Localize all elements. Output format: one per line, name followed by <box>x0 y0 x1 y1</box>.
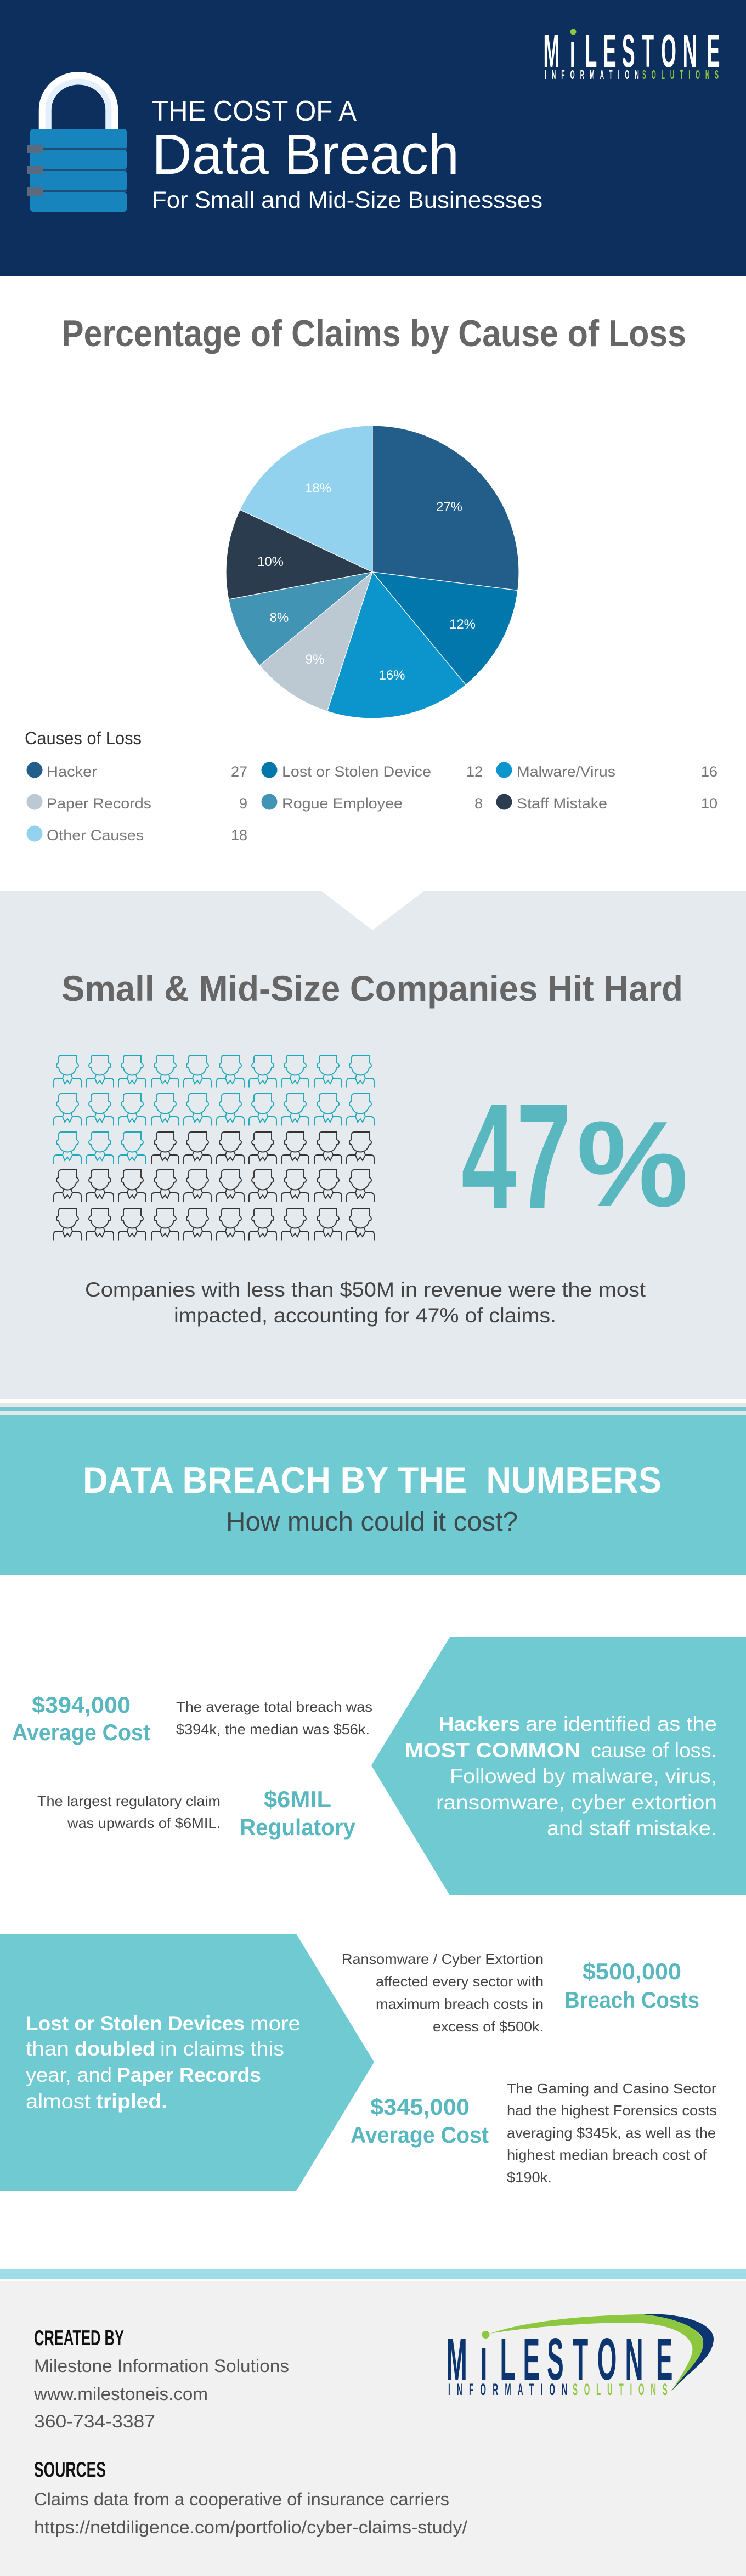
text: average total breach: The average total breach was <box>176 1699 372 1715</box>
subtitle: For Small and Mid-Size Businessses <box>152 187 542 213</box>
banner heading: DATA BREACH BY THE NUMBERS <box>83 1459 662 1501</box>
text: largest regulatory claim <box>37 1793 221 1831</box>
divider: light blue band <box>0 2269 746 2279</box>
pie chart: claims by cause: 9% <box>306 652 324 667</box>
text: contact details <box>33 2356 289 2431</box>
heading: small and mid-size: Small & Mid-Size Companies Hit Hard <box>61 968 683 1009</box>
panel: hackers arrow callout: ransomware, cyber extortion <box>436 1791 717 1814</box>
text: gaming and casino sector <box>507 2080 717 2186</box>
stat: 345,000 average cost: $345,000 <box>370 2094 470 2120</box>
legend title: Causes of Loss <box>25 728 142 748</box>
pie chart: claims by cause: 18% <box>305 481 331 496</box>
text: ransomware cyber extortion: excess of $500k. <box>433 2018 544 2035</box>
legend: causes of loss: Rogue Employee <box>282 795 403 812</box>
panel: hackers arrow callout: are identified as the <box>525 1713 717 1735</box>
text: gaming and casino sector: had the highest Forensics costs <box>507 2102 717 2119</box>
stat: 500,000 breach costs: Breach Costs <box>564 1987 699 2013</box>
panel: hackers arrow callout: Followed by malware, virus, <box>450 1765 717 1787</box>
panel: lost or stolen devices arrow callout: more <box>250 2012 301 2035</box>
text: ransomware cyber extortion: affected every sector with <box>376 1973 544 1990</box>
legend: causes of loss: Malware/Virus <box>517 763 615 780</box>
logo: milestone white: SOLUTIONS <box>642 67 719 82</box>
legend: causes of loss: 9 <box>239 795 247 812</box>
logo: milestone colour: SOLUTIONS <box>573 2380 668 2398</box>
panel: lost or stolen devices arrow callout <box>0 1934 374 2191</box>
pie chart: claims by cause <box>226 426 519 718</box>
stat: 500,000 breach costs: $500,000 <box>583 1958 681 1984</box>
title: the cost of a: THE COST OF A <box>152 95 357 127</box>
stat: 394,000 average cost <box>12 1692 150 1745</box>
title: data breach: Data Breach <box>152 123 459 186</box>
panel: lost or stolen devices arrow callout: doubled <box>75 2037 155 2060</box>
logo: milestone white: INFORMATION <box>545 67 639 82</box>
pie chart: claims by cause: 16% <box>378 668 405 683</box>
legend: causes of loss: 16 <box>701 763 717 780</box>
stat: 345,000 average cost <box>351 2094 489 2148</box>
big number: 47 percent: % <box>577 1096 688 1232</box>
pie chart: claims by cause: 27% <box>436 500 462 514</box>
heading: sources: SOURCES <box>34 2458 106 2482</box>
panel: hackers arrow callout: cause of loss. <box>591 1739 717 1762</box>
paragraph: companies under 50M: impacted, accounting for 47% of claims. <box>174 1304 556 1327</box>
text: sources list <box>34 2489 467 2537</box>
legend: causes of loss: Lost or Stolen Device <box>282 763 431 780</box>
stat: 6MIL regulatory <box>240 1786 356 1840</box>
stat: 394,000 average cost: Average Cost <box>12 1719 150 1745</box>
banner: data breach by the numbers <box>0 1415 746 1575</box>
text: contact details: Milestone Information Solutions <box>34 2356 289 2376</box>
panel: hackers arrow callout: and staff mistake. <box>547 1817 717 1839</box>
legend: causes of loss: 8 <box>474 795 483 812</box>
legend: causes of loss: 12 <box>466 763 483 780</box>
legend: causes of loss: Paper Records <box>47 795 151 812</box>
text: ransomware cyber extortion: Ransomware / Cyber Extortion <box>342 1951 544 1967</box>
panel: lost or stolen devices arrow callout: almost <box>26 2090 91 2113</box>
panel: lost or stolen devices arrow callout: than <box>26 2037 69 2060</box>
stat: 500,000 breach costs <box>564 1958 699 2013</box>
text: contact details: www.milestoneis.com <box>33 2384 208 2404</box>
text: average total breach <box>176 1699 372 1737</box>
panel: lost or stolen devices arrow callout: Paper Records <box>117 2064 261 2086</box>
stat: 394,000 average cost: $394,000 <box>32 1692 131 1718</box>
text: contact details: 360-734-3387 <box>34 2411 155 2431</box>
paragraph: companies under 50M: Companies with less than $50M in revenue were the most <box>85 1278 646 1301</box>
panel: hackers arrow callout <box>371 1637 746 1895</box>
legend: causes of loss: Staff Mistake <box>517 795 607 812</box>
panel: hackers arrow callout: MOST COMMON <box>405 1739 580 1762</box>
legend: causes of loss: 10 <box>701 795 717 812</box>
stat: 6MIL regulatory: Regulatory <box>240 1814 356 1840</box>
panel: lost or stolen devices arrow callout: in claims this <box>160 2037 284 2060</box>
logo: milestone white: MıLESTONE <box>543 25 720 77</box>
pie chart: claims by cause: 8% <box>270 610 289 625</box>
heading: percentage of claims: Percentage of Claims by Cause of Loss <box>61 313 686 354</box>
text: sources list: Claims data from a cooperative of insurance carriers <box>34 2489 449 2509</box>
logo: milestone colour: INFORMATION <box>448 2380 567 2398</box>
pie chart: claims by cause: 12% <box>449 617 476 632</box>
panel: lost or stolen devices arrow callout: year, and <box>26 2064 112 2086</box>
panel: hackers arrow callout: Hackers <box>439 1713 520 1735</box>
pie chart: claims by cause: 10% <box>257 554 284 569</box>
stat: 345,000 average cost: Average Cost <box>351 2122 489 2148</box>
banner subheading: How much could it cost? <box>226 1507 518 1537</box>
text: sources list: https://netdiligence.com/portfolio/cyber-claims-study/ <box>34 2517 467 2537</box>
legend: causes of loss: 18 <box>231 827 247 843</box>
text: largest regulatory claim: was upwards of $6MIL. <box>67 1815 221 1831</box>
legend: causes of loss: 27 <box>231 763 247 780</box>
heading: created by: CREATED BY <box>34 2326 124 2350</box>
legend: causes of loss: Hacker <box>47 763 97 780</box>
legend: causes of loss <box>25 728 717 843</box>
logo: milestone colour: MıLESTONE <box>447 2325 672 2392</box>
stat: 6MIL regulatory: $6MIL <box>264 1786 331 1812</box>
panel: small and mid-size companies <box>0 891 746 1399</box>
logo: milestone colour <box>447 2314 714 2398</box>
text: gaming and casino sector: The Gaming and Casino Sector <box>507 2080 716 2097</box>
panel: header banner <box>0 0 746 276</box>
text: average total breach: $394k, the median was $56k. <box>176 1721 370 1737</box>
text: ransomware cyber extortion: maximum breach costs in <box>376 1996 544 2012</box>
big number: 47 percent: 47 <box>461 1073 571 1239</box>
icon grid: people, 47 percent <box>54 1055 374 1241</box>
panel: lost or stolen devices arrow callout: Lost or Stolen Devices <box>26 2012 245 2035</box>
legend: causes of loss: Other Causes <box>47 827 144 843</box>
divider band <box>0 1403 746 1415</box>
panel: footer <box>0 2281 746 2576</box>
text: gaming and casino sector: averaging $345k, as well as the <box>507 2125 716 2141</box>
panel: lost or stolen devices arrow callout: tripled. <box>96 2090 167 2113</box>
text: ransomware cyber extortion <box>342 1951 544 2035</box>
text: gaming and casino sector: highest median breach cost of <box>507 2147 707 2163</box>
text: gaming and casino sector: $190k. <box>507 2169 552 2186</box>
paragraph: companies under 50M <box>85 1278 646 1327</box>
text: largest regulatory claim: The largest regulatory claim <box>37 1793 221 1809</box>
icon: padlock <box>27 78 127 212</box>
